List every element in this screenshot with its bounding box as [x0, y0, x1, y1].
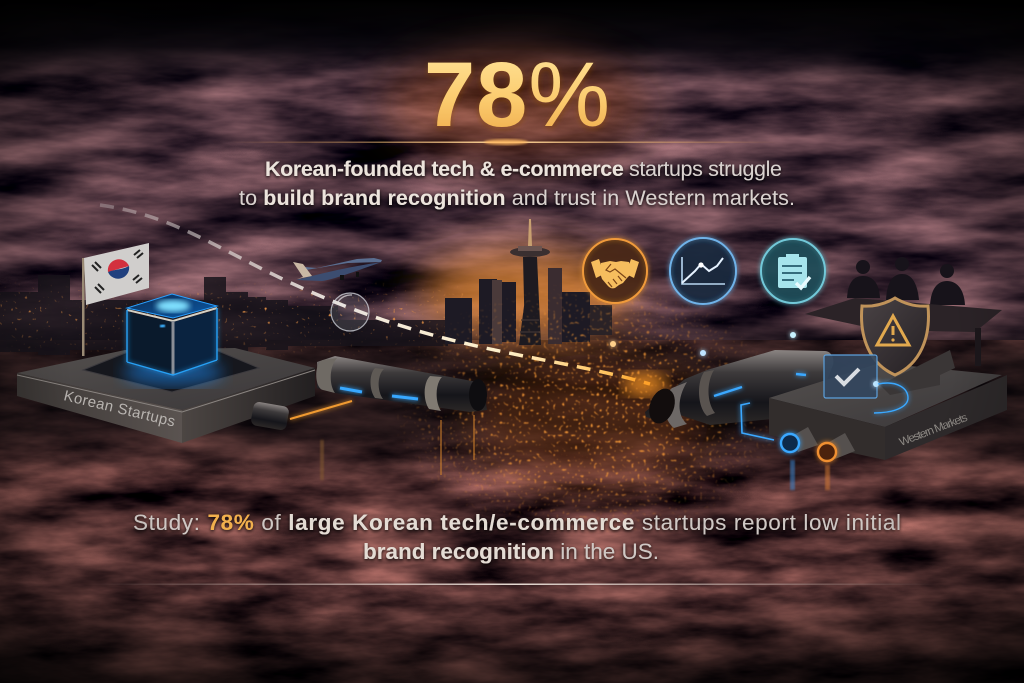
table [805, 298, 1002, 332]
subheading line 1: Korean-founded tech & e-commerce startups struggle [265, 157, 782, 181]
people silhouettes [847, 257, 965, 305]
icon: handshake [583, 239, 647, 347]
panel: Western Markets platform [769, 298, 1007, 461]
shield pedestal [880, 350, 955, 395]
sparks: scattered orange particles [398, 292, 771, 530]
space needle [510, 219, 550, 345]
dashed flight path [100, 205, 667, 396]
right damaged cable [645, 350, 833, 440]
left fibre cable [316, 356, 487, 412]
connector plugs [781, 427, 855, 461]
platform slab [769, 363, 1002, 427]
centre skyline [445, 268, 612, 344]
plane [293, 258, 382, 281]
platform slab [17, 348, 315, 443]
water reflections [320, 415, 830, 490]
icon: growth chart [670, 238, 736, 356]
icon: clipboard check [761, 239, 825, 338]
headline stat: 78% [424, 44, 610, 146]
small cable with orange glow [250, 401, 352, 431]
study note [133, 510, 901, 564]
Western boardroom: silhouettes and table [805, 257, 1002, 366]
glass bubble [331, 293, 369, 331]
pedestal [83, 333, 259, 392]
glowing cube [123, 294, 223, 386]
study line 1: Study: 78% of large Korean tech/e-commerce startups report low initial [133, 510, 901, 535]
flag [82, 243, 149, 356]
divider: headline rule [230, 139, 780, 145]
shield warning [862, 298, 928, 375]
panel: Korean Startups platform [17, 243, 487, 443]
city skyline [0, 219, 612, 360]
divider: bottom rule [90, 584, 940, 585]
platform label: Western Markets [898, 412, 970, 449]
platform label: Korean Startups [62, 387, 177, 431]
subheading [239, 157, 795, 210]
subheading line 2: to build brand recognition and trust in Western markets. [239, 186, 795, 210]
check panel [824, 355, 908, 413]
trust icons row [583, 238, 825, 356]
city window lights [0, 280, 480, 360]
study line 2: brand recognition in the US. [363, 539, 659, 564]
left skyline [0, 275, 448, 355]
